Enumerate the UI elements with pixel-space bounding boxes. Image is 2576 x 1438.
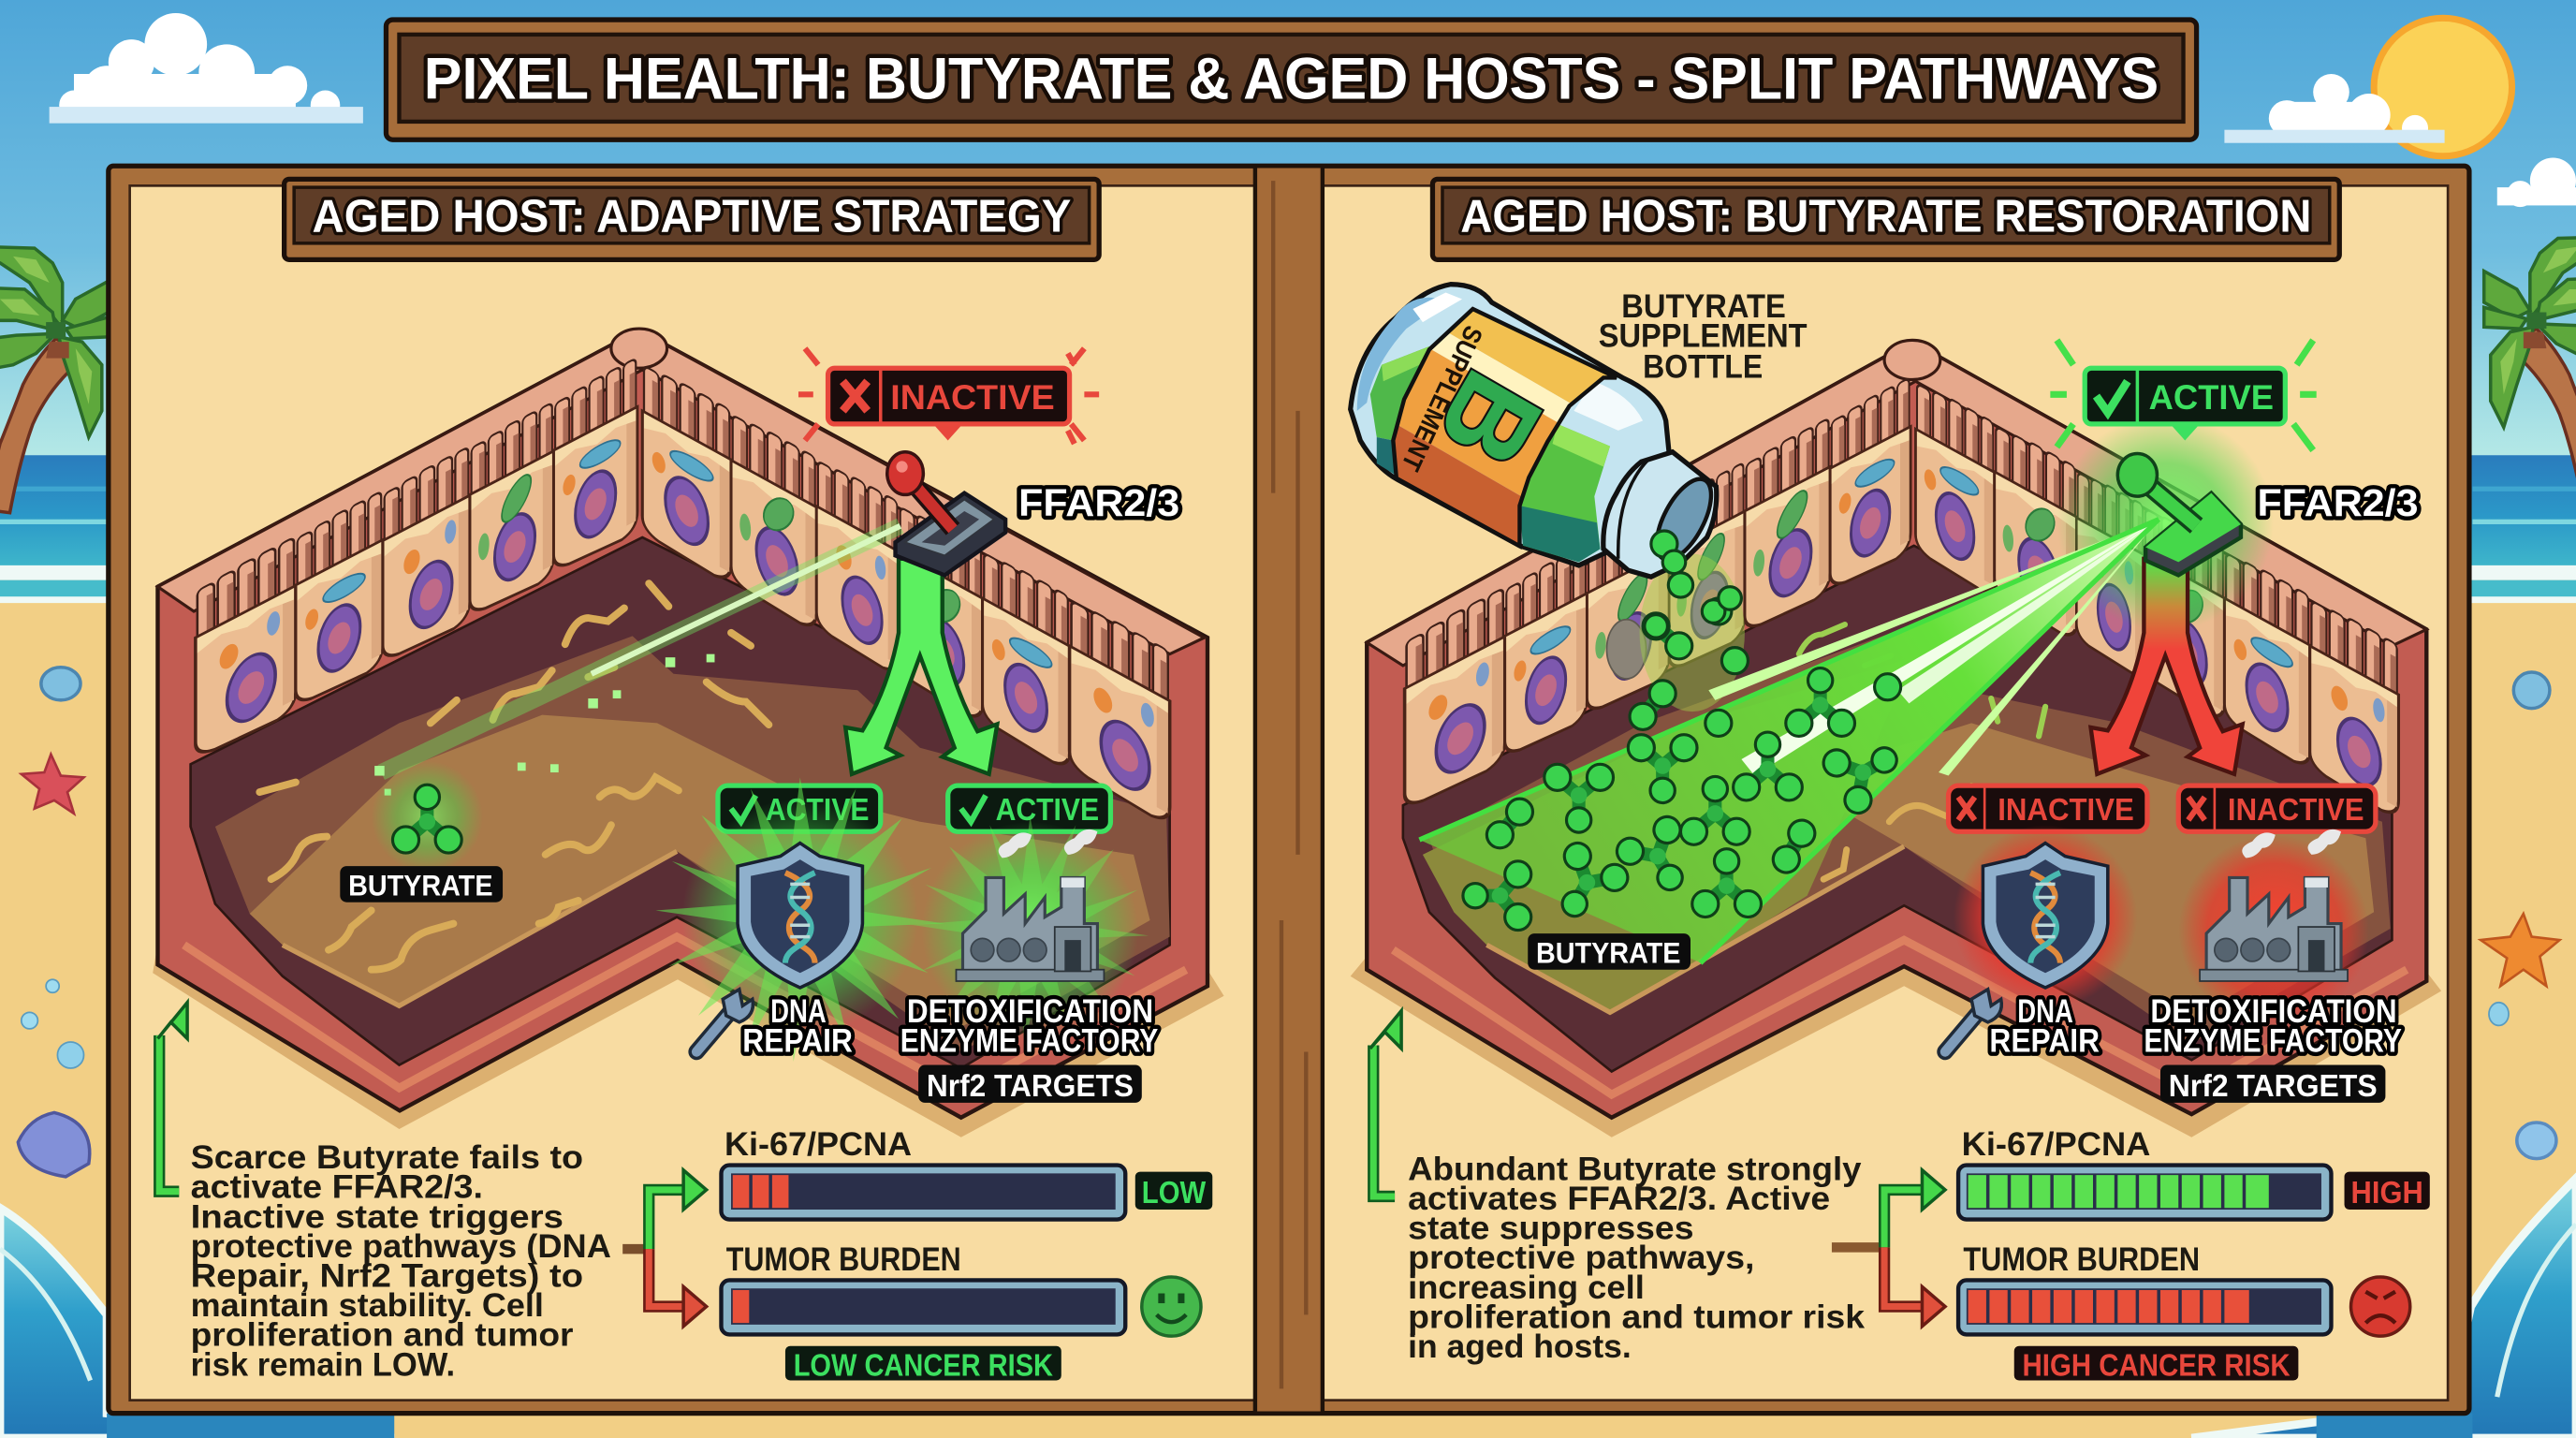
tissue cross-section left bbox=[153, 329, 1224, 1137]
tumor burden gauge left: TUMOR BURDEN bbox=[726, 1241, 961, 1278]
palm tree right bbox=[2484, 237, 2576, 503]
butyrate molecules swarm bbox=[1463, 598, 1912, 932]
label DNA repair right: REPAIR bbox=[1989, 1022, 2100, 1059]
explanation text right: increasing cell bbox=[1408, 1269, 1645, 1306]
butyrate label right: BUTYRATE bbox=[1536, 936, 1680, 970]
Ki-67 gauge right: HIGH bbox=[2351, 1176, 2423, 1211]
faint signal beam left bbox=[374, 526, 900, 796]
supplement bottle bbox=[1348, 282, 1719, 580]
icon: detox factory glowing bbox=[912, 815, 1149, 1049]
explanation text right: Abundant Butyrate strongly bbox=[1408, 1151, 1862, 1187]
icon: sad face bbox=[2351, 1277, 2410, 1336]
inactive badge factory bbox=[2178, 785, 2376, 831]
connector arrows right bbox=[1832, 1170, 1945, 1327]
status badge inactive: INACTIVE bbox=[890, 378, 1055, 417]
panel heading right bbox=[1432, 179, 2339, 259]
explanation text right: in aged hosts. bbox=[1408, 1328, 1632, 1365]
label DNA repair right: DNA bbox=[2017, 993, 2073, 1030]
title text: PIXEL HEALTH: BUTYRATE & AGED HOSTS - SPLIT PATHWAYS bbox=[424, 46, 2159, 111]
cloud right bbox=[2224, 74, 2576, 207]
wooden frame with two panels bbox=[109, 166, 2469, 1414]
explanation text left: protective pathways (DNA bbox=[191, 1228, 611, 1265]
active badge DNA repair bbox=[718, 785, 881, 831]
explanation text right: proliferation and tumor risk bbox=[1408, 1299, 1866, 1335]
switch FFAR2/3 inactive bbox=[887, 452, 1005, 575]
explanation text left: proliferation and tumor bbox=[191, 1317, 574, 1354]
epithelial cells right wall bbox=[642, 361, 1170, 826]
gut microbes bbox=[259, 583, 768, 970]
switch FFAR2/3 active bbox=[2117, 453, 2241, 575]
inactive badge DNA repair bbox=[1949, 785, 2147, 831]
bottle text: B bbox=[1412, 350, 1568, 488]
panel heading right: AGED HOST: BUTYRATE RESTORATION bbox=[1460, 192, 2311, 242]
label FFAR2/3 left: FFAR2/3 bbox=[1018, 481, 1179, 524]
epithelial cells left wall right panel bbox=[1405, 377, 1910, 814]
status badge active bbox=[2050, 340, 2317, 450]
active badge factory bbox=[948, 785, 1110, 831]
label bottle: BUTYRATE bbox=[1621, 288, 1786, 325]
label detoxification factory: DETOXIFICATION bbox=[907, 993, 1153, 1030]
title plaque bbox=[386, 20, 2197, 139]
tumor burden gauge right bbox=[1958, 1241, 2331, 1334]
gut microbes right bbox=[1799, 624, 2045, 812]
label detoxification factory right: ENZYME FACTORY bbox=[2144, 1022, 2402, 1059]
palm tree left bbox=[0, 246, 109, 513]
explanation text left: Repair, Nrf2 Targets) to bbox=[191, 1257, 583, 1295]
high cancer risk label: HIGH CANCER RISK bbox=[2023, 1348, 2291, 1383]
up arrow to tissue left bbox=[157, 1003, 187, 1192]
label DNA repair: REPAIR bbox=[742, 1022, 853, 1059]
label bottle: BOTTLE bbox=[1643, 349, 1763, 386]
up arrow to tissue right bbox=[1370, 1011, 1401, 1196]
explanation text right: state suppresses bbox=[1408, 1211, 1694, 1247]
label Nrf2 targets: Nrf2 TARGETS bbox=[927, 1069, 1134, 1104]
icon: DNA repair shield glowing bbox=[655, 777, 944, 1062]
label Nrf2 targets right: Nrf2 TARGETS bbox=[2169, 1069, 2378, 1104]
explanation text left: maintain stability. Cell bbox=[191, 1287, 544, 1324]
inactive badge DNA repair: INACTIVE bbox=[1998, 793, 2134, 828]
icon: detox factory red glow bbox=[2178, 829, 2369, 1025]
explanation text left: activate FFAR2/3. bbox=[191, 1169, 483, 1206]
beach decorations right bbox=[2481, 672, 2559, 1159]
floor worms right bbox=[1823, 806, 2089, 951]
bottle text: SUPPLEMENT bbox=[1396, 321, 1488, 476]
pills pouring from bottle bbox=[1645, 531, 1741, 638]
epithelial cells right wall right panel bbox=[1915, 380, 2398, 819]
panel heading left bbox=[285, 179, 1099, 259]
fork arrows green to red bbox=[2091, 559, 2243, 774]
cloud left bbox=[50, 13, 363, 124]
explanation text left: risk remain LOW. bbox=[191, 1346, 455, 1383]
inactive badge factory: INACTIVE bbox=[2228, 793, 2364, 828]
label detoxification factory right: DETOXIFICATION bbox=[2150, 993, 2397, 1030]
icon: happy face bbox=[1142, 1277, 1201, 1336]
label FFAR2/3 right: FFAR2/3 bbox=[2258, 481, 2419, 524]
tumor burden gauge left bbox=[721, 1241, 1125, 1334]
strong green signal beam bbox=[1419, 414, 2274, 963]
panel: left adaptive strategy bbox=[153, 179, 1224, 1383]
label detoxification factory bbox=[900, 993, 1158, 1059]
explanation text right bbox=[1408, 1151, 1866, 1365]
panel: right butyrate restoration bbox=[1314, 179, 2441, 1383]
label bottle bbox=[1599, 288, 1808, 386]
bottle neck and cap bbox=[1603, 452, 1722, 577]
butyrate molecule left bbox=[372, 761, 483, 873]
epithelial cells left wall bbox=[196, 358, 637, 763]
butyrate label left: BUTYRATE bbox=[348, 869, 493, 902]
icon: wrench right bbox=[1945, 990, 2001, 1051]
beach decorations left bbox=[18, 668, 90, 1177]
explanation text left bbox=[191, 1139, 611, 1383]
label detoxification factory: ENZYME FACTORY bbox=[900, 1022, 1158, 1059]
panel heading left: AGED HOST: ADAPTIVE STRATEGY bbox=[312, 192, 1071, 242]
green fork arrows left bbox=[845, 559, 997, 774]
label DNA repair bbox=[742, 993, 853, 1059]
label DNA repair: DNA bbox=[770, 993, 827, 1030]
icon: DNA repair shield red glow bbox=[1954, 825, 2137, 1009]
Ki-67 gauge left: LOW bbox=[1142, 1176, 1207, 1211]
label detoxification factory right bbox=[2144, 993, 2402, 1059]
Ki-67 gauge left: Ki-67/PCNA bbox=[724, 1126, 912, 1163]
Ki-67 gauge left bbox=[721, 1126, 1212, 1220]
sun bbox=[2374, 18, 2512, 156]
tumor burden gauge right: TUMOR BURDEN bbox=[1963, 1241, 2200, 1278]
icon: wrench left bbox=[696, 990, 753, 1051]
status badge active: ACTIVE bbox=[2149, 378, 2274, 417]
explanation text left: Scarce Butyrate fails to bbox=[191, 1139, 583, 1176]
active badge DNA repair: ACTIVE bbox=[766, 793, 869, 828]
tissue cross-section right bbox=[1351, 340, 2441, 1137]
bottle label bbox=[1395, 311, 1608, 543]
label bottle: SUPPLEMENT bbox=[1599, 317, 1808, 354]
status badge inactive bbox=[798, 348, 1099, 444]
explanation text left: Inactive state triggers bbox=[191, 1198, 564, 1235]
label DNA repair right bbox=[1989, 993, 2100, 1059]
explanation text right: activates FFAR2/3. Active bbox=[1408, 1181, 1830, 1217]
low cancer risk label: LOW CANCER RISK bbox=[794, 1348, 1053, 1383]
Ki-67 gauge right bbox=[1958, 1126, 2430, 1220]
explanation text right: protective pathways, bbox=[1408, 1240, 1754, 1276]
connector arrows left bbox=[622, 1170, 707, 1327]
gray nucleus faded by green wash bbox=[1606, 554, 1745, 712]
active badge factory: ACTIVE bbox=[996, 793, 1099, 828]
Ki-67 gauge right: Ki-67/PCNA bbox=[1962, 1126, 2150, 1163]
